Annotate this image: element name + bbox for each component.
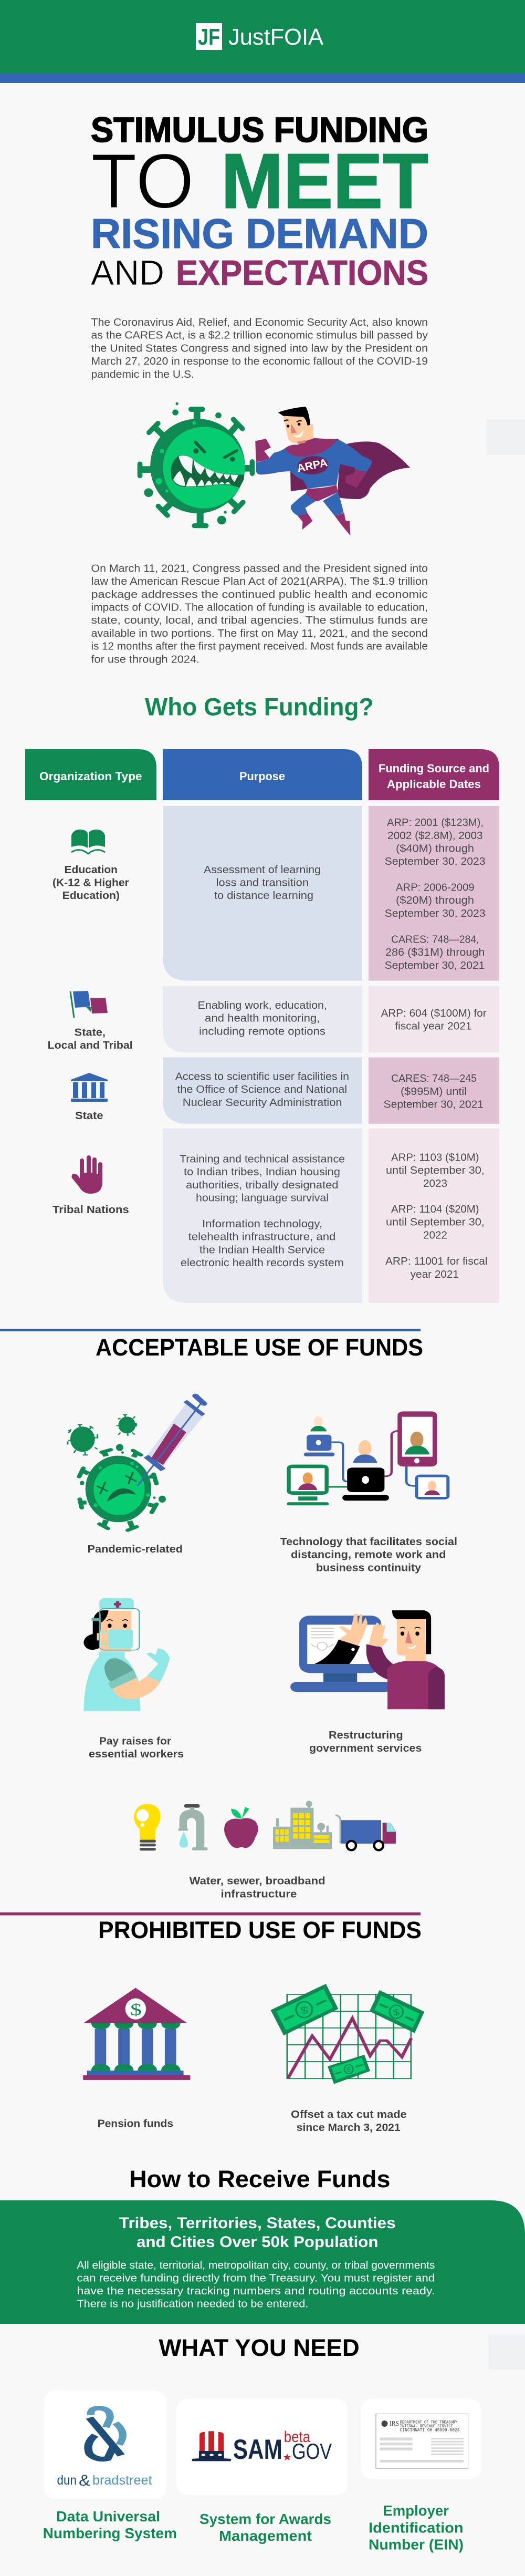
icon: light bulb [134,1804,161,1850]
row: tribal nations: telehealth infrastructure, and [188,1232,335,1243]
card: dun and bradstreet logo: bradstreet [92,2473,152,2488]
row: state, local and tribal: and health monitoring, [205,1013,320,1025]
intro paragraph: CARES Act: as the CARES Act, is a $2.2 trillion economic stimulus bill passed by [91,330,428,342]
illustration: chart with cash: $ [300,2005,309,2016]
row: tribal nations: ARP: 1103 ($10M) [391,1152,479,1163]
card: dun and bradstreet logo: dun [57,2473,77,2488]
faint side block [487,419,525,455]
icon: apple [224,1807,258,1848]
row: education: CARES: 748—284, [391,934,479,946]
caption: offset a tax cut: Offset a tax cut made [291,2109,407,2120]
row: state: State [75,1110,103,1122]
row: education: to distance learning [214,890,313,902]
label: data universal numbering system: Data Universal [56,2508,160,2525]
heading: how to receive funds: How to Receive Funds [129,2166,390,2192]
row: education: ($20M) through [396,895,474,906]
caption: technology: Technology that facilitates social [280,1536,457,1548]
row: education [52,806,499,980]
icon: raised hand [71,1155,102,1194]
row: state [71,1057,499,1124]
row: education: September 30, 2023 [385,908,486,919]
caption: pandemic-related: Pandemic-related [87,1544,183,1555]
row: tribal nations: until September 30, [386,1165,485,1176]
caption: pay raises: essential workers [89,1749,184,1760]
panel: how to receive funds: Tribes, Territories, States, Counties [119,2215,396,2232]
row: state: September 30, 2021 [384,1099,484,1111]
row: state: the Office of Science and National [177,1084,347,1095]
card: SAM.gov logo: SAM [233,2434,282,2465]
row: tribal nations: electronic health records system [181,1257,344,1269]
card: SAM.gov logo [176,2399,348,2495]
label: system for awards management: System for Awards [200,2511,331,2527]
title: RISING DEMAND [91,210,428,257]
table: who gets funding [25,749,499,1303]
panel: how to receive funds: There is no justification needed to be entered. [77,2298,308,2310]
intro paragraph: CARES Act: March 27, 2020 in response to the economic fallout of the COVID-19 [91,356,428,367]
row: state, local and tribal: ARP: 604 ($100M) for [381,1008,487,1019]
title: TO [91,138,194,225]
row: education: ARP: 2001 ($123M), [387,817,484,829]
card: IRS EIN letter: DEPARTMENT OF THE TREASURY [400,2420,457,2425]
row: tribal nations: until September 30, [386,1217,485,1228]
heading: Who Gets Funding: Who Gets Funding? [145,693,374,721]
row: tribal nations: Information technology, [202,1218,322,1230]
label: employer identification number [369,2502,464,2553]
row: tribal nations: 2022 [423,1229,447,1241]
row: state: Access to scientific user facilities in [175,1071,349,1082]
paragraph: American Rescue Plan Act: impacts of COVID. The allocation of funding is available to education, [91,602,428,614]
caption: technology: business continuity [316,1563,422,1574]
icon: water tap [178,1804,208,1850]
caption: restructuring [309,1730,422,1754]
paragraph: American Rescue Plan Act: is 12 months after the first payment received. Most funds are available [91,641,428,653]
label: employer identification number: Identification [369,2520,464,2536]
intro paragraph: CARES Act: the United States Congress and signed into law by the President on [91,343,428,354]
icon: ARPA superhero [255,407,410,535]
caption: offset a tax cut: since March 3, 2021 [297,2122,401,2134]
row: tribal nations: authorities, tribally designated [186,1180,338,1191]
intro paragraph: CARES Act: The Coronavirus Aid, Relief, and Economic Security Act, also known [91,317,428,328]
illustration: chart with cash [271,1984,424,2084]
row: education: loss and transition [216,877,309,889]
card: IRS EIN letter: INTERNAL REVENUE SERVICE [400,2424,453,2429]
table header row: Applicable Dates [387,778,481,791]
row: education: 2002 ($2.8M), 2003 [387,830,483,842]
row: tribal nations: 2023 [423,1178,447,1189]
row: education: 286 ($31M) through [385,947,485,958]
paragraph: American Rescue Plan Act: state, county, local, and tribal agencies. The stimulus funds are [91,615,428,626]
card: IRS EIN letter [361,2399,481,2479]
title: MEET [221,138,428,225]
table header row: Purpose [239,770,285,783]
illustration: pension bank: $ [130,2001,142,2019]
title: EXPECTATIONS [176,253,428,293]
caption: offset a tax cut [291,2109,407,2134]
card: IRS EIN letter: CINCINNATI OH 45999-0023 [400,2428,460,2433]
card: dun and bradstreet logo [44,2391,167,2499]
icon: delivery truck [335,1815,396,1850]
icon: city buildings [273,1801,332,1849]
title [91,110,428,293]
paragraph: American Rescue Plan Act: law the American Rescue Plan Act of 2021(ARPA). The $1.9 trillion [91,576,428,587]
paragraph: American Rescue Plan Act: On March 11, 2021, Congress passed and the President signed into [91,563,428,574]
table header row: Funding Source and [379,762,489,775]
caption: restructuring: Restructuring [329,1730,403,1741]
label: system for awards management: Management [219,2528,312,2544]
row: tribal nations: ARP: 1104 ($20M) [391,1204,479,1215]
row: state, local and tribal [48,986,499,1053]
caption: technology: distancing, remote work and [291,1549,446,1561]
table header row: Organization Type [39,770,142,783]
row: education: September 30, 2023 [385,856,486,867]
label: system for awards management [200,2511,331,2544]
row: state, local and tribal: State, [75,1027,106,1038]
header banner with logo: JustFOIA [228,24,324,50]
card: dun and bradstreet logo: & [79,2472,90,2489]
caption: water, sewer, broadband: infrastructure [220,1889,297,1900]
caption: technology [280,1536,457,1574]
card: SAM.gov logo: beta [284,2428,310,2446]
label: data universal numbering system [43,2508,177,2541]
row: education: ($40M) through [396,843,474,854]
row: tribal nations: year 2021 [411,1269,459,1280]
row: education: Assessment of learning [204,864,321,876]
row: tribal nations: ARP: 11001 for fiscal [385,1256,487,1267]
paragraph: American Rescue Plan Act: package addresses the continued public health and economic [91,589,428,601]
row: state, local and tribal: fiscal year 2021 [395,1020,471,1032]
caption: water, sewer, broadband [190,1876,326,1900]
illustration: essential worker nurse [83,1598,170,1711]
row: state, local and tribal: Local and Tribal [48,1040,133,1051]
row: state: CARES: 748—245 [391,1073,477,1084]
illustration: chart with cash: $ [346,2066,351,2073]
row: education: (K-12 & Higher [52,877,129,889]
panel: how to receive funds: and Cities Over 50k Population [136,2233,378,2251]
label: data universal numbering system: Numbering System [43,2525,177,2541]
caption: pay raises: Pay raises for [99,1736,171,1747]
label: employer identification number: Employer [383,2502,449,2519]
icon: book [71,830,105,854]
row: tribal nations: the Indian Health Service [200,1244,325,1256]
title: STIMULUS FUNDING [91,110,428,150]
label: employer identification number: Number (EIN) [369,2537,464,2553]
paragraph: American Rescue Plan Act [91,563,428,665]
row: tribal nations: Training and technical assistance [180,1154,345,1165]
illustration: pension bank [83,1988,190,2080]
row: tribal nations [52,1129,499,1303]
caption: water, sewer, broadband: Water, sewer, broadband [190,1876,326,1887]
caption: restructuring: government services [309,1743,422,1754]
card: IRS EIN letter: IRS [390,2420,399,2428]
icon: ARPA superhero: ARPA [296,457,329,474]
panel: how to receive funds: have the necessary tracking numbers and routing accounts ready. [77,2285,435,2297]
title: AND [91,253,164,293]
row: tribal nations: to Indian tribes, Indian housing [184,1166,340,1178]
illustration: remote work technology network [287,1411,449,1505]
row: education: Education [64,864,118,876]
header banner with logo: JF [198,24,220,50]
icon: flags [70,991,108,1018]
row: state, local and tribal: including remote options [199,1026,326,1038]
row: education: Education) [62,890,120,902]
paragraph: American Rescue Plan Act: for use through 2024. [91,654,200,665]
caption: pay raises [89,1736,184,1760]
panel: how to receive funds [0,2200,525,2324]
card: SAM.gov logo: GOV [292,2439,332,2464]
row: state: ($995M) until [401,1086,467,1098]
header banner with logo [0,0,525,83]
panel: how to receive funds: All eligible state, territorial, metropolitan city, county, or tribal governments [77,2260,435,2271]
icon: government building [71,1073,108,1102]
panel: how to receive funds: can receive funding directly from the Treasury. You must register and [77,2272,435,2284]
row: tribal nations: Tribal Nations [52,1204,129,1216]
icon: angry virus [138,402,255,528]
paragraph: American Rescue Plan Act: available in two portions. The first on May 11, 2021, and the second [91,628,428,639]
heading: what you need: WHAT YOU NEED [159,2334,360,2361]
icons: infrastructure row [134,1801,396,1850]
intro paragraph: CARES Act: pandemic in the U.S. [91,369,194,380]
row: education: ARP: 2006-2009 [396,882,475,893]
row: state: Nuclear Security Administration [183,1097,342,1109]
illustration: chart with cash: $ [393,2008,400,2018]
illustration: virus and ARPA superhero [138,402,410,535]
faint side block [488,2334,525,2370]
row: state, local and tribal: Enabling work, education, [197,1000,327,1011]
intro paragraph: CARES Act [91,317,428,380]
illustration: syringe and defeated virus [68,1396,204,1530]
row: tribal nations: housing; language survival [196,1193,329,1204]
caption: pension funds: Pension funds [98,2118,173,2130]
row: education: September 30, 2021 [385,960,485,971]
heading: acceptable use of funds: ACCEPTABLE USE OF FUNDS [96,1334,423,1361]
table header row [25,749,499,800]
heading: prohibited use of funds: PROHIBITED USE OF FUNDS [98,1917,422,1943]
illustration: restructuring government services [290,1610,445,1709]
